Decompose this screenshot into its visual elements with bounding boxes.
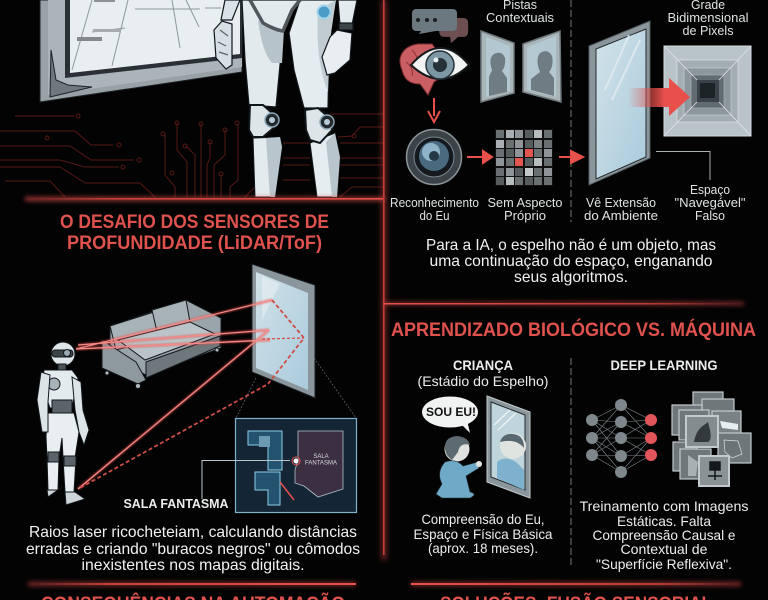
arrow: into tunnel (628, 78, 690, 116)
text: mirror is not an object: seus algoritmos. (514, 269, 628, 286)
text: laser explanation: Raios laser ricocheteiam, calculando distâncias (29, 524, 357, 541)
label: sala fantasma: SALA FANTASMA (124, 496, 229, 511)
heading: depth sensors: PROFUNDIDADE (LiDAR/ToF) (67, 233, 322, 254)
icon: sofa (102, 300, 221, 388)
captions: mirror diagram: Espaço (690, 182, 730, 197)
heading: depth sensors: O DESAFIO DOS SENSORES DE (60, 212, 329, 233)
text: child description (414, 511, 553, 556)
text: child description: Espaço e Física Básica (414, 526, 553, 542)
captions: mirror diagram: Bidimensional (668, 10, 749, 25)
column heading: deep learning: DEEP LEARNING (610, 357, 718, 373)
icon: baby mirror: SOU EU! (426, 407, 476, 419)
captions: mirror diagram: Próprio (504, 208, 546, 223)
text: laser explanation: erradas e criando "buracos negros" ou cômodos (26, 541, 360, 558)
icon: camera lens (406, 130, 462, 184)
robot arms and hands (214, 0, 357, 75)
icon: contextual mirrors (481, 31, 561, 102)
text: deep learning description: "Superfície Reflexiva". (596, 556, 732, 572)
icon: large mirror (589, 21, 650, 185)
icon: neural network (586, 399, 657, 478)
captions: mirror diagram: Vê Extensão (586, 195, 656, 210)
text: deep learning description: Estáticas. Falta (617, 513, 711, 529)
icon: speech bubbles (412, 9, 468, 43)
icon: tall mirror (252, 264, 315, 398)
heading: depth sensors (60, 212, 329, 254)
arrow: camera to grid (467, 151, 492, 163)
text: laser explanation (26, 524, 360, 574)
arrow: grid to mirror (559, 151, 583, 163)
captions: mirror diagram: Contextuais (486, 10, 554, 25)
text: mirror is not an object: Para a IA, o espelho não é um objeto, mas (426, 237, 716, 254)
text: mirror is not an object (426, 237, 716, 286)
text: mirror is not an object: uma continuação do espaço, enganando (430, 253, 713, 270)
captions: mirror diagram: Reconhecimento (390, 195, 479, 210)
inset: digital map with ghost room (236, 358, 356, 512)
text: child description: Compreensão do Eu, (422, 511, 544, 527)
icon: pixel grid (495, 129, 553, 186)
text: child description: (aprox. 18 meses). (428, 540, 538, 556)
captions: mirror diagram: Falso (695, 208, 725, 223)
captions: mirror diagram: do Ambiente (584, 208, 658, 223)
laser beams (76, 300, 304, 489)
captions: mirror diagram: Sem Aspecto (488, 195, 562, 210)
dashed divider (570, 358, 572, 568)
column heading: child: CRIANÇA (453, 357, 513, 373)
panel: mirror with floor reflection (40, 0, 242, 102)
callout line: navigable space (656, 152, 710, 180)
icon: brain and eye (400, 44, 469, 95)
captions: mirror diagram: do Eu (420, 208, 450, 223)
text: deep learning description (580, 498, 748, 572)
arrow: eye to camera (428, 98, 440, 122)
icon: baby mirror (422, 396, 530, 498)
captions: mirror diagram (390, 0, 749, 223)
captions: mirror diagram: de Pixels (682, 23, 734, 38)
column heading: child (418, 357, 548, 389)
icon: image stack (672, 392, 751, 486)
robot legs (242, 0, 340, 197)
text: deep learning description: Contextual de (620, 541, 708, 557)
center dashed divider top right (570, 0, 572, 222)
inset: digital map with ghost room: SALA (313, 454, 329, 460)
text: laser explanation: inexistentes nos mapas digitais. (82, 557, 304, 574)
text: deep learning description: Treinamento com Imagens (580, 498, 748, 514)
captions: mirror diagram: "Navegável" (674, 195, 746, 210)
column heading: child: (Estádio do Espelho) (418, 373, 548, 389)
icon: perspective pixel tunnel (664, 46, 751, 136)
inset: digital map with ghost room: FANTASMA (305, 460, 337, 466)
icon: robot full figure (37, 342, 89, 505)
text: deep learning description: Compreensão Causal e (592, 527, 736, 543)
circuit traces background (0, 114, 384, 197)
label: sala fantasma (124, 460, 290, 511)
